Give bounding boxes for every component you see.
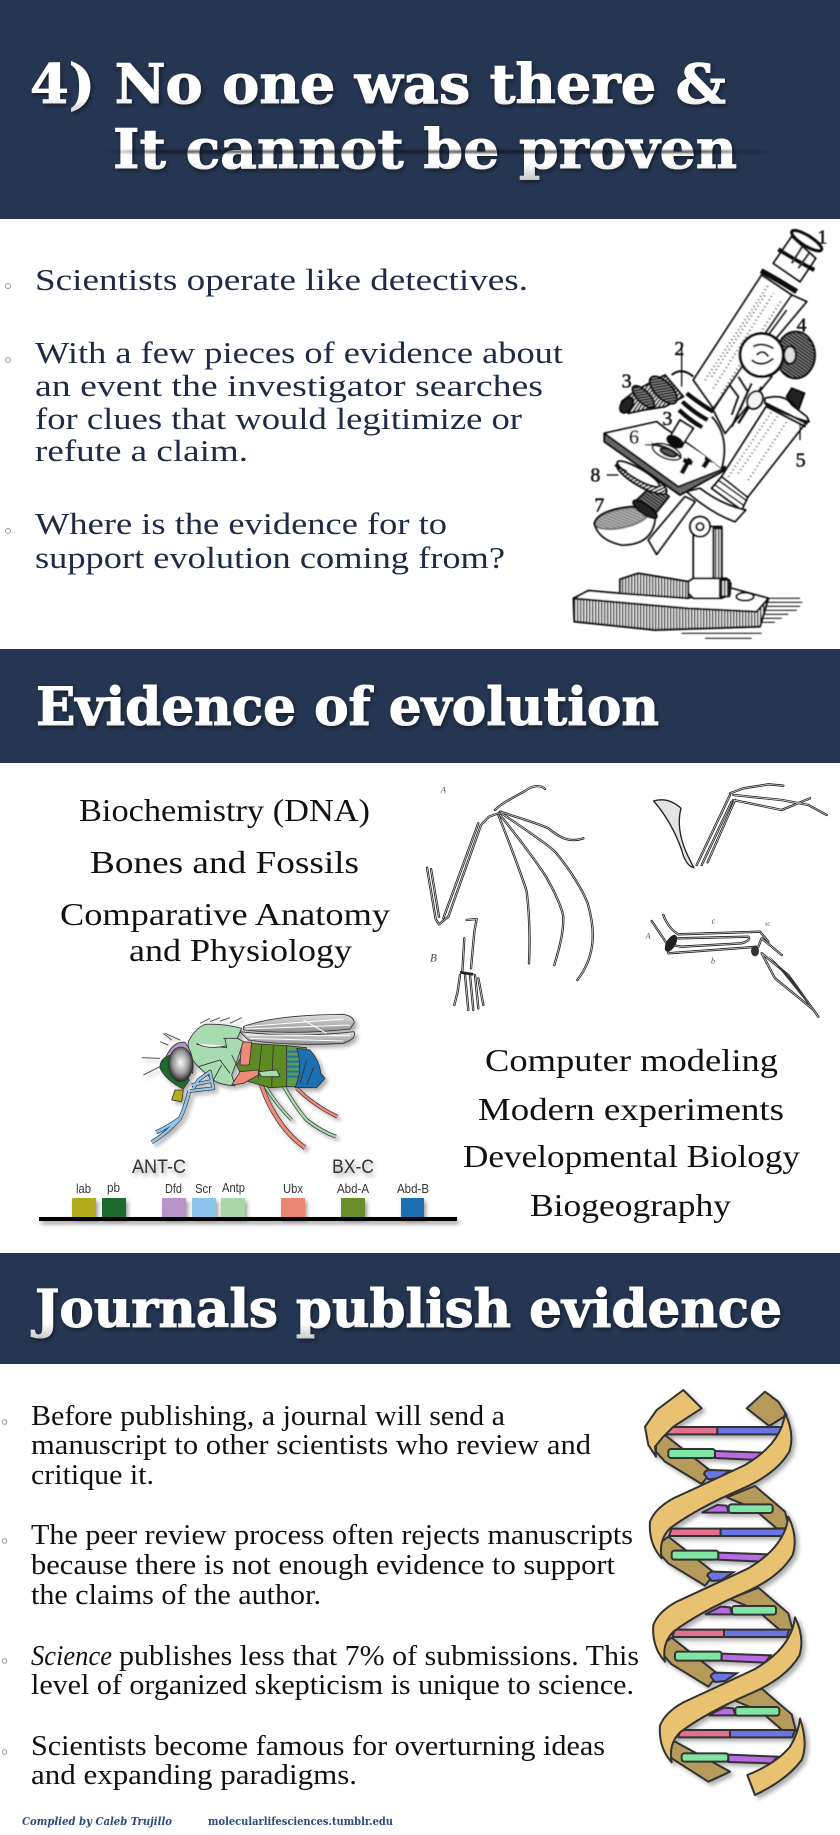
heading: Evidence of evolution: Evidence of evolution: [36, 677, 659, 738]
text block: peer review: and expanding paradigms.: [31, 1760, 357, 1791]
text block: evidence list right: Developmental Biology: [463, 1138, 800, 1174]
icon: microscope: 2: [674, 338, 684, 360]
title: No one was there: It cannot be proven: [113, 117, 737, 181]
text block: evidence list right: Computer modeling: [485, 1042, 778, 1078]
gene labels: [76, 1180, 429, 1196]
section band: journals: [0, 1253, 840, 1364]
text block: evidence list left: Comparative Anatomy: [60, 896, 390, 932]
gene labels: Abd-B: [397, 1181, 429, 1196]
gene labels: pb: [107, 1180, 120, 1195]
footer credit: [22, 1815, 393, 1828]
icon: microscope: 4: [797, 315, 807, 337]
text block: detectives: support evolution coming from?: [35, 540, 505, 575]
illustration: comparative limb bones: B: [430, 953, 437, 965]
gene boxes: [39, 1198, 457, 1221]
heading: Journals publish evidence: Journals publish evidence: [31, 1279, 782, 1340]
gene cluster labels: [132, 1157, 374, 1178]
text block: evidence list left: Bones and Fossils: [90, 844, 359, 880]
title: No one was there: 4) No one was there &: [30, 52, 726, 116]
text block: peer review: publishes less that 7% of submissions. This: [119, 1641, 639, 1672]
icon: microscope: 3: [662, 408, 672, 430]
text block: detectives: Scientists operate like detectives.: [35, 262, 528, 297]
icon: microscope: 1: [817, 226, 827, 248]
illustration: comparative limb bones: c: [712, 916, 716, 925]
icon: microscope: [573, 226, 827, 638]
text block: peer review: because there is not enough evidence to support: [31, 1550, 615, 1581]
icon: DNA double helix: [645, 1390, 805, 1795]
text block: peer review: the claims of the author.: [31, 1580, 321, 1611]
gene labels: Antp: [222, 1180, 245, 1195]
text block: evidence list right: Biogeography: [530, 1187, 731, 1223]
text block: evidence list left: [60, 792, 390, 968]
gene labels: lab: [76, 1181, 91, 1196]
icon: microscope: 3: [622, 371, 632, 393]
gene labels: Abd-A: [337, 1181, 369, 1196]
text block: peer review: critique it.: [31, 1460, 154, 1491]
illustration: comparative limb bones: b: [711, 956, 715, 965]
text block: detectives: an event the investigator searches: [35, 368, 543, 403]
gene labels: Dfd: [165, 1181, 182, 1196]
text block: evidence list left: and Physiology: [129, 932, 352, 968]
text block: evidence list left: Biochemistry (DNA): [79, 792, 370, 828]
gene labels: Ubx: [283, 1181, 303, 1196]
header band: [0, 0, 840, 219]
illustration: comparative limb bones: A: [645, 931, 651, 940]
section band: evidence of evolution: [0, 649, 840, 763]
text block: detectives: With a few pieces of evidence about: [35, 335, 563, 370]
text block: peer review: [2, 1401, 639, 1791]
text block: peer review: Scientists become famous for overturning ideas: [31, 1731, 605, 1762]
text block: peer review: level of organized skepticism is unique to science.: [31, 1670, 634, 1701]
chart: Hox gene map: [39, 1157, 457, 1221]
title: No one was there: [30, 52, 773, 181]
illustration: comparative limb bones: A: [440, 785, 446, 794]
footer credit: Complied by Caleb Trujillo: [22, 1815, 172, 1828]
text block: peer review: manuscript to other scientists who review and: [31, 1430, 591, 1461]
illustration: comparative limb bones: sc: [765, 922, 770, 928]
text block: detectives: Where is the evidence for to: [35, 506, 447, 541]
illustration: fruit fly with Hox colouring: [142, 1014, 355, 1148]
footer credit: molecularlifesciences.tumblr.edu: [208, 1815, 393, 1828]
text block: evidence list right: Modern experiments: [478, 1091, 784, 1127]
text block: detectives: [6, 262, 563, 575]
text block: peer review: The peer review process often rejects manuscripts: [31, 1520, 633, 1551]
icon: microscope: 7: [594, 495, 604, 517]
illustration: comparative limb bones: [427, 784, 827, 1017]
gene labels: Scr: [195, 1181, 213, 1196]
icon: microscope: 6: [629, 426, 639, 448]
text block: detectives: refute a claim.: [35, 433, 248, 468]
text block: detectives: for clues that would legitimize or: [35, 401, 523, 436]
text block: peer review: Science: [31, 1641, 112, 1672]
text block: evidence list right: [463, 1042, 800, 1223]
gene cluster labels: ANT-C: [132, 1157, 186, 1178]
text block: peer review: Before publishing, a journal will send a: [31, 1401, 506, 1432]
icon: microscope: 8: [590, 465, 600, 487]
icon: microscope: 5: [796, 450, 806, 472]
gene cluster labels: BX-C: [332, 1157, 374, 1178]
